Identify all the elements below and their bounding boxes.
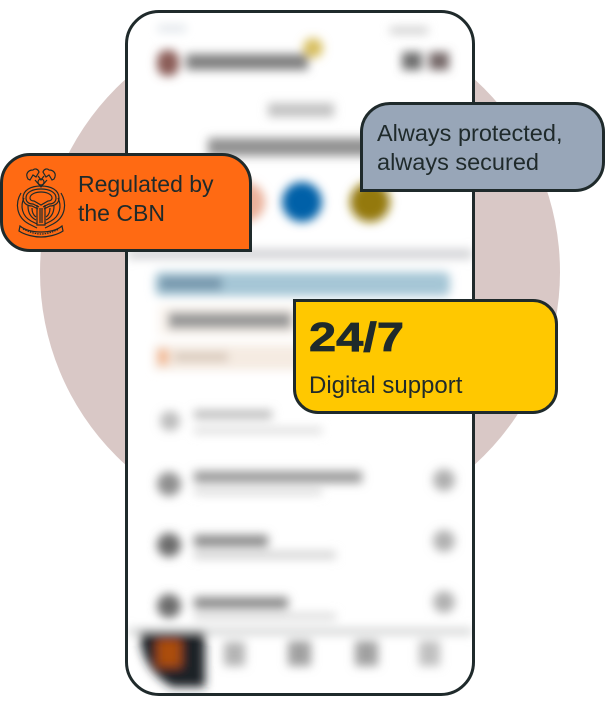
callout text: always protected: Always protected,	[377, 120, 562, 146]
callout text: always protected: always secured	[377, 149, 539, 175]
callout: 24/7 digital support	[293, 299, 558, 414]
callout: regulated by the CBN	[0, 153, 252, 252]
blurred app screen	[128, 22, 472, 693]
icon: CBN emblem	[16, 168, 66, 238]
callout text: digital support: Digital support	[309, 372, 462, 399]
callout text: regulated by the CBN	[78, 171, 214, 226]
callout text: regulated by the CBN: the CBN	[78, 200, 165, 226]
background circle	[40, 12, 560, 532]
phone mockup	[125, 10, 475, 696]
stat: 24/7: 24/7	[309, 314, 404, 360]
callout text: regulated by the CBN: Regulated by	[78, 171, 214, 197]
callout text: always protected	[377, 120, 562, 175]
callout: always protected	[360, 102, 605, 192]
